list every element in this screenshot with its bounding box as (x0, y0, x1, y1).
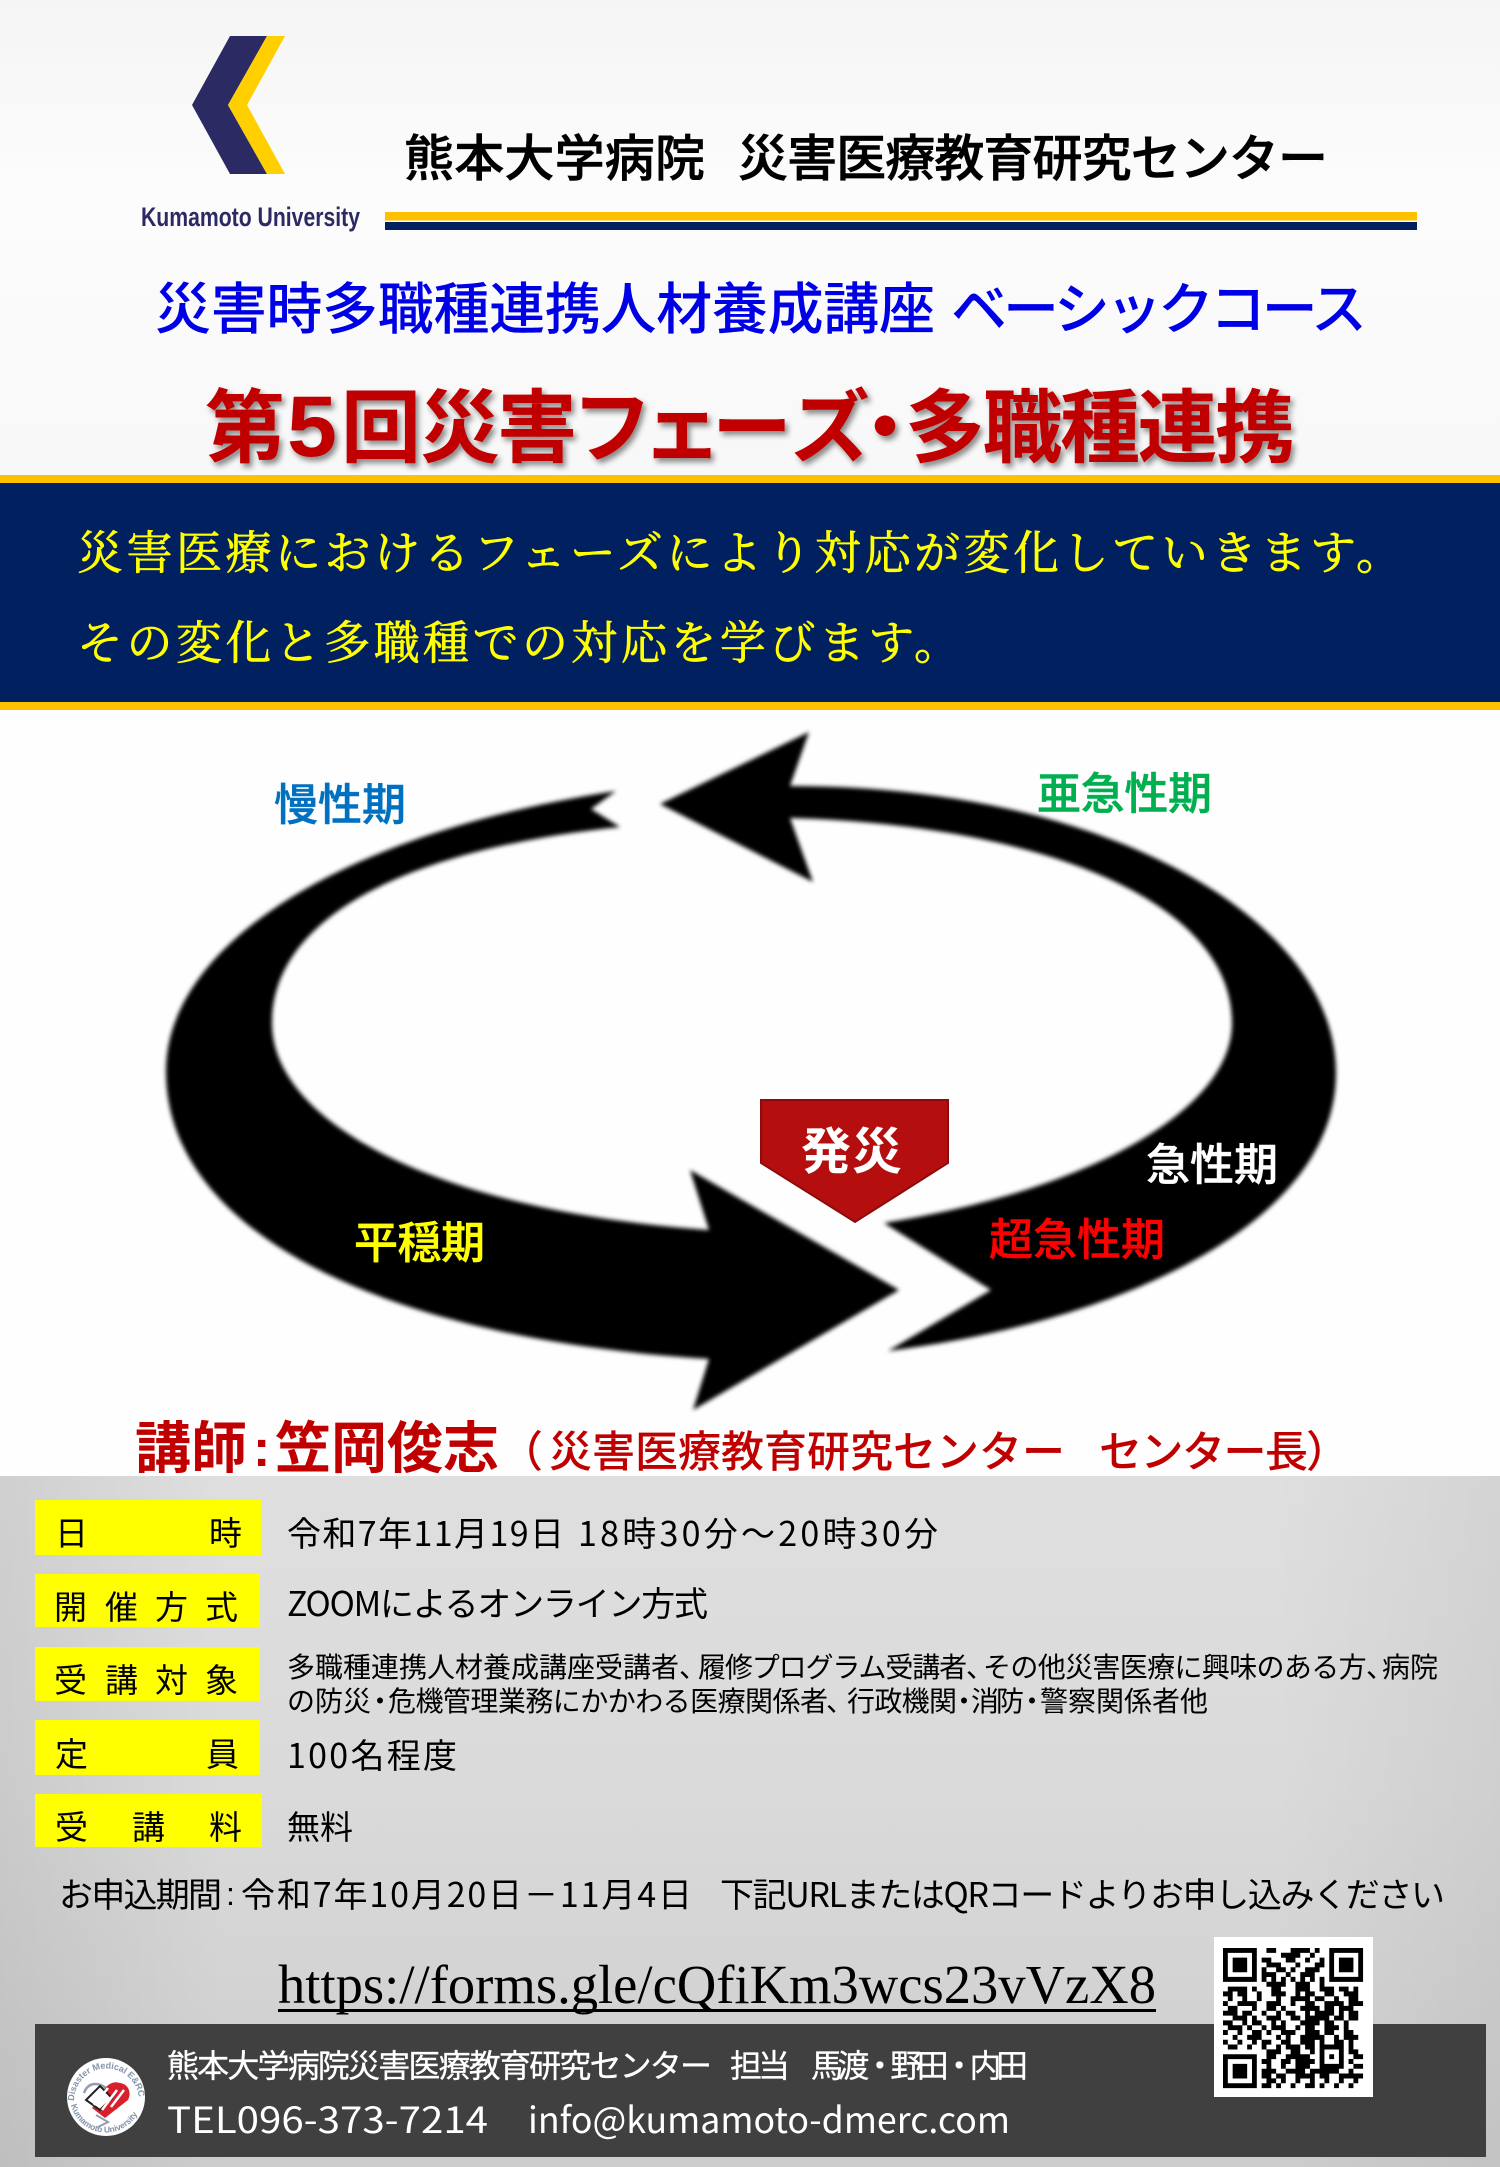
contact: telephone: TEL096-373-7214 (167, 2092, 488, 2144)
marker: disaster onset (761, 1100, 948, 1222)
marker: disaster onset: 発災 (801, 1112, 902, 1184)
contact: organisation and staff (167, 2041, 1028, 2087)
label: subacute phase: 亜急性期 (1037, 758, 1212, 822)
logo: Kumamoto University: Kumamoto University (141, 202, 360, 232)
heading: center name (404, 119, 1328, 191)
row: audience: ・ (1018, 1680, 1046, 1720)
lecturer: （ (500, 1418, 543, 1480)
session title: 多職種連携 (905, 364, 1295, 480)
row: audience: 警察関係者他 (1040, 1680, 1208, 1720)
page background: details panel (0, 1476, 1500, 2167)
row: audience: 行政機関 (847, 1680, 957, 1720)
row: audience: その他災害医療に興味のある方、 (983, 1646, 1394, 1686)
heading: center name: 災害医療教育研究センター (738, 119, 1328, 191)
row: fee: 無料 (287, 1801, 353, 1849)
label: chronic phase: 慢性期 (274, 769, 406, 833)
label: hyperacute phase: 超急性期 (989, 1204, 1165, 1268)
lecturer: 笠岡俊志 (275, 1404, 499, 1485)
row: audience: 履修プログラム受講者、 (698, 1646, 994, 1686)
row: capacity: 定員 (55, 1728, 239, 1776)
row: audience: 多職種連携人材養成講座受講者、 (287, 1646, 707, 1686)
row: format: ZOOMによるオンライン方式 (287, 1577, 708, 1626)
application period: 下記URLまたはQRコードよりお申し込みください (720, 1868, 1445, 1917)
row: audience: の防災 (287, 1680, 371, 1720)
lecturer: センター長 (1099, 1418, 1308, 1480)
arrow: disaster to recovery (660, 732, 1336, 1351)
contact: organisation and staff: 馬渡・野田・内田 (811, 2041, 1028, 2087)
session title: 5 (287, 379, 337, 475)
lecturer: ） (1306, 1418, 1349, 1480)
row: date: 18時30分～20時30分 (578, 1507, 938, 1556)
lecturer: 災害医療教育研究センター (549, 1418, 1065, 1480)
row: format (35, 1574, 708, 1629)
row: audience (35, 1646, 1438, 1720)
emblem: Disaster Medical E&RC: Disaster Medical E&RC (68, 2062, 144, 2100)
row: audience: 、 (826, 1680, 854, 1720)
label: calm phase: 平穏期 (354, 1207, 485, 1271)
application period: : (226, 1876, 235, 1912)
application period: お申込期間 (59, 1868, 222, 1917)
contact: organisation and staff: 熊本大学病院災害医療教育研究センター (167, 2041, 712, 2087)
lecturer: : (253, 1420, 270, 1478)
row: audience: 危機管理業務にかかわる医療関係者 (388, 1680, 828, 1720)
row: date: 日時 (55, 1507, 242, 1555)
label: acute phase: 急性期 (1146, 1129, 1278, 1193)
contact: organisation and staff: 担当 (730, 2041, 790, 2087)
session title: 第 (205, 364, 285, 480)
session title (205, 364, 1295, 480)
emblem: Disaster Medical E&RC (67, 2058, 145, 2136)
row: capacity: 100名程度 (287, 1729, 457, 1778)
row: audience: ・ (366, 1680, 394, 1720)
course title: ベーシックコース (951, 265, 1367, 346)
arrow: calm period (166, 791, 899, 1410)
contact bar (35, 2024, 1486, 2157)
lecturer (135, 1404, 1349, 1485)
emblem: Disaster Medical E&RC: Kumamoto University (71, 2104, 138, 2133)
header double rule (385, 212, 1417, 230)
page background: diagram area (0, 710, 1500, 1476)
summary band (0, 475, 1500, 710)
row: fee (35, 1794, 353, 1849)
contact: email: info@kumamoto-dmerc.com (528, 2092, 1010, 2144)
row: fee: 受講料 (55, 1801, 242, 1849)
course title (155, 265, 1367, 346)
row: format: 開催方式 (54, 1581, 238, 1629)
QR code (1214, 1937, 1373, 2097)
row: audience: 受講対象 (54, 1654, 238, 1702)
row: audience: 消防 (971, 1680, 1024, 1720)
row: audience: ・ (950, 1680, 978, 1720)
session title: ・ (845, 364, 925, 480)
row: capacity (35, 1720, 457, 1778)
session title: 回災害フェーズ (341, 364, 870, 480)
summary line 2: その変化と多職種での対応を学びます。 (77, 607, 960, 673)
row: audience: 病院 (1382, 1646, 1438, 1686)
details table (35, 1500, 1438, 1849)
registration url: https://forms.gle/cQfiKm3wcs23vVzX8 (278, 1954, 1156, 2015)
page background: top (0, 0, 1500, 475)
logo: Kumamoto University (141, 36, 360, 232)
row: date: 令和7年11月19日 (287, 1507, 564, 1556)
cycle diagram (166, 732, 1336, 1410)
summary line 1: 災害医療におけるフェーズにより対応が変化していきます。 (77, 517, 1402, 583)
lecturer: 講師 (135, 1404, 247, 1485)
application period (59, 1868, 1445, 1917)
course title: 災害時多職種連携人材養成講座 (155, 265, 935, 346)
row: date (35, 1500, 938, 1556)
application period: 令和7年10月20日－11月4日 (241, 1868, 692, 1917)
heading: center name: 熊本大学病院 (404, 119, 705, 191)
